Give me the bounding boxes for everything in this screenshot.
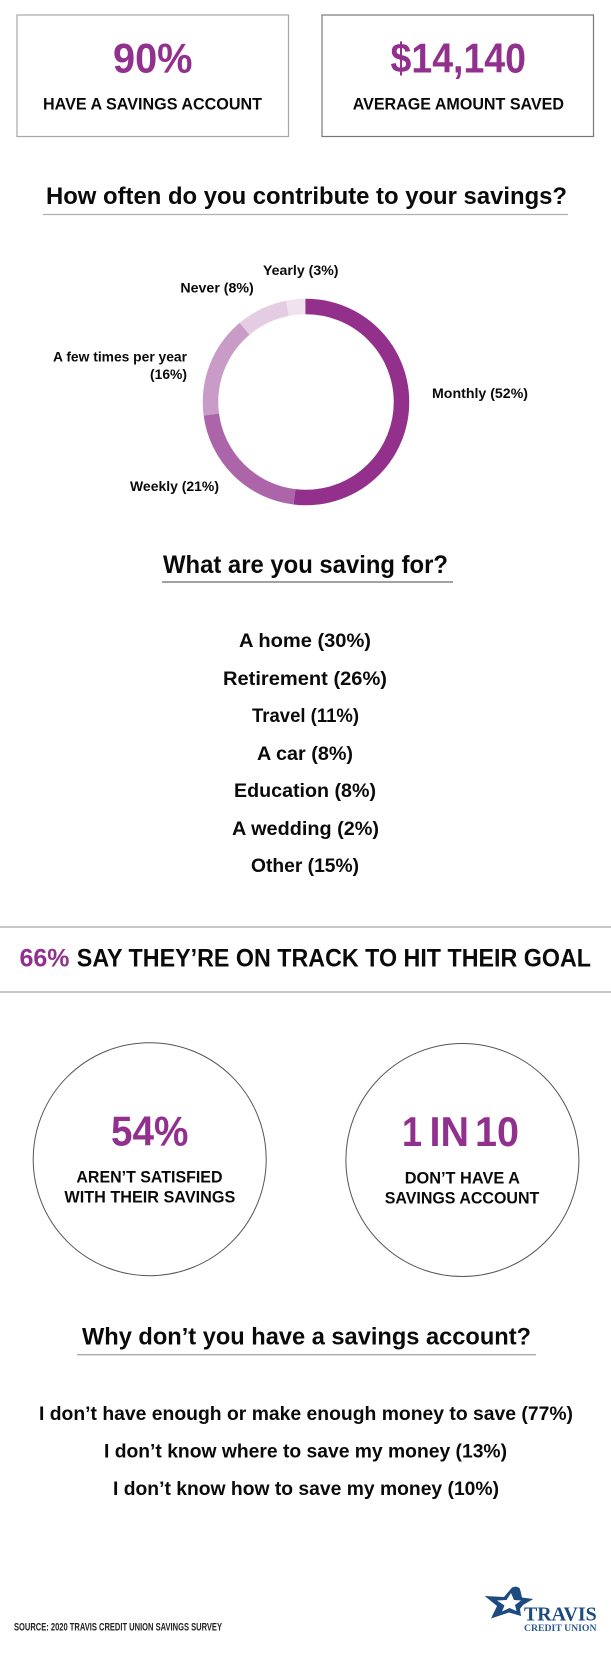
circle panel: no savings account xyxy=(346,1044,579,1276)
logo: Travis Credit Union xyxy=(485,1586,597,1634)
label: never: Never (8%) xyxy=(180,280,254,296)
caption: don't have a savings account xyxy=(385,1168,540,1207)
list: saving goals: A home (30%) xyxy=(239,630,371,652)
segment: yearly 3% xyxy=(210,306,402,498)
stat: 1 in 10: IN xyxy=(430,1108,469,1155)
heading: what are you saving for: What are you saving for? xyxy=(163,551,448,579)
segment: weekly 21% xyxy=(210,306,402,498)
caption: don't have a savings account: DON’T HAVE A xyxy=(405,1168,520,1187)
panel: have a savings account xyxy=(17,15,288,136)
banner: on track to hit their goal: 66% xyxy=(20,945,70,973)
list: saving goals: A wedding (2%) xyxy=(232,818,379,840)
source note: SOURCE: 2020 TRAVIS CREDIT UNION SAVINGS SURVEY xyxy=(14,1622,222,1634)
wordmark subline: CREDIT UNION xyxy=(524,1624,597,1634)
list: saving goals: Travel (11%) xyxy=(252,705,359,727)
label: yearly: Yearly (3%) xyxy=(263,262,338,278)
panel: average amount saved xyxy=(322,15,594,136)
wordmark: TRAVIS xyxy=(524,1604,597,1626)
list: saving goals: Education (8%) xyxy=(234,780,376,802)
caption: average amount saved: AVERAGE AMOUNT SAVED xyxy=(353,94,564,113)
icon: star with eagle xyxy=(485,1586,533,1618)
caption: aren't satisfied xyxy=(64,1167,235,1207)
caption: aren't satisfied: AREN’T SATISFIED xyxy=(76,1167,223,1186)
stat: 1 in 10: 1 xyxy=(402,1108,422,1155)
stat: 54%: 54% xyxy=(111,1108,188,1155)
donut chart: contribution frequency xyxy=(210,306,402,498)
list: reasons xyxy=(39,1403,573,1500)
caption: have a savings account: HAVE A SAVINGS ACCOUNT xyxy=(43,94,263,113)
caption: aren't satisfied: WITH THEIR SAVINGS xyxy=(64,1188,235,1207)
banner: on track to hit their goal xyxy=(0,927,611,992)
label: monthly: Monthly (52%) xyxy=(432,385,528,401)
label: a few times per year xyxy=(53,349,188,382)
list: reasons: I don’t have enough or make enough money to save (77%) xyxy=(39,1403,573,1425)
segment: a few times per year 16% xyxy=(210,306,402,498)
list: saving goals: A car (8%) xyxy=(257,743,353,765)
list: saving goals: Retirement (26%) xyxy=(223,668,387,690)
stat: $14,140: $14,140 xyxy=(390,34,526,81)
heading: how often do you contribute: How often do you contribute to your savings? xyxy=(46,183,567,210)
list: saving goals: Other (15%) xyxy=(251,855,359,877)
label: a few times per year: A few times per year xyxy=(53,349,188,365)
list: saving goals xyxy=(223,630,387,877)
segment: monthly 52% xyxy=(210,306,402,498)
label: weekly: Weekly (21%) xyxy=(130,478,219,494)
list: reasons: I don’t know where to save my money (13%) xyxy=(104,1440,507,1462)
stat: 1 in 10: 10 xyxy=(475,1108,519,1155)
segment: never 8% xyxy=(210,306,402,498)
list: reasons: I don’t know how to save my money (10%) xyxy=(113,1478,499,1500)
heading: why don't you have a savings account: Why don’t you have a savings account? xyxy=(82,1323,531,1350)
circle panel: not satisfied xyxy=(33,1043,266,1276)
stat: 90%: 90% xyxy=(113,34,192,81)
label: a few times per year: (16%) xyxy=(150,366,187,382)
caption: don't have a savings account: SAVINGS ACCOUNT xyxy=(385,1188,540,1207)
